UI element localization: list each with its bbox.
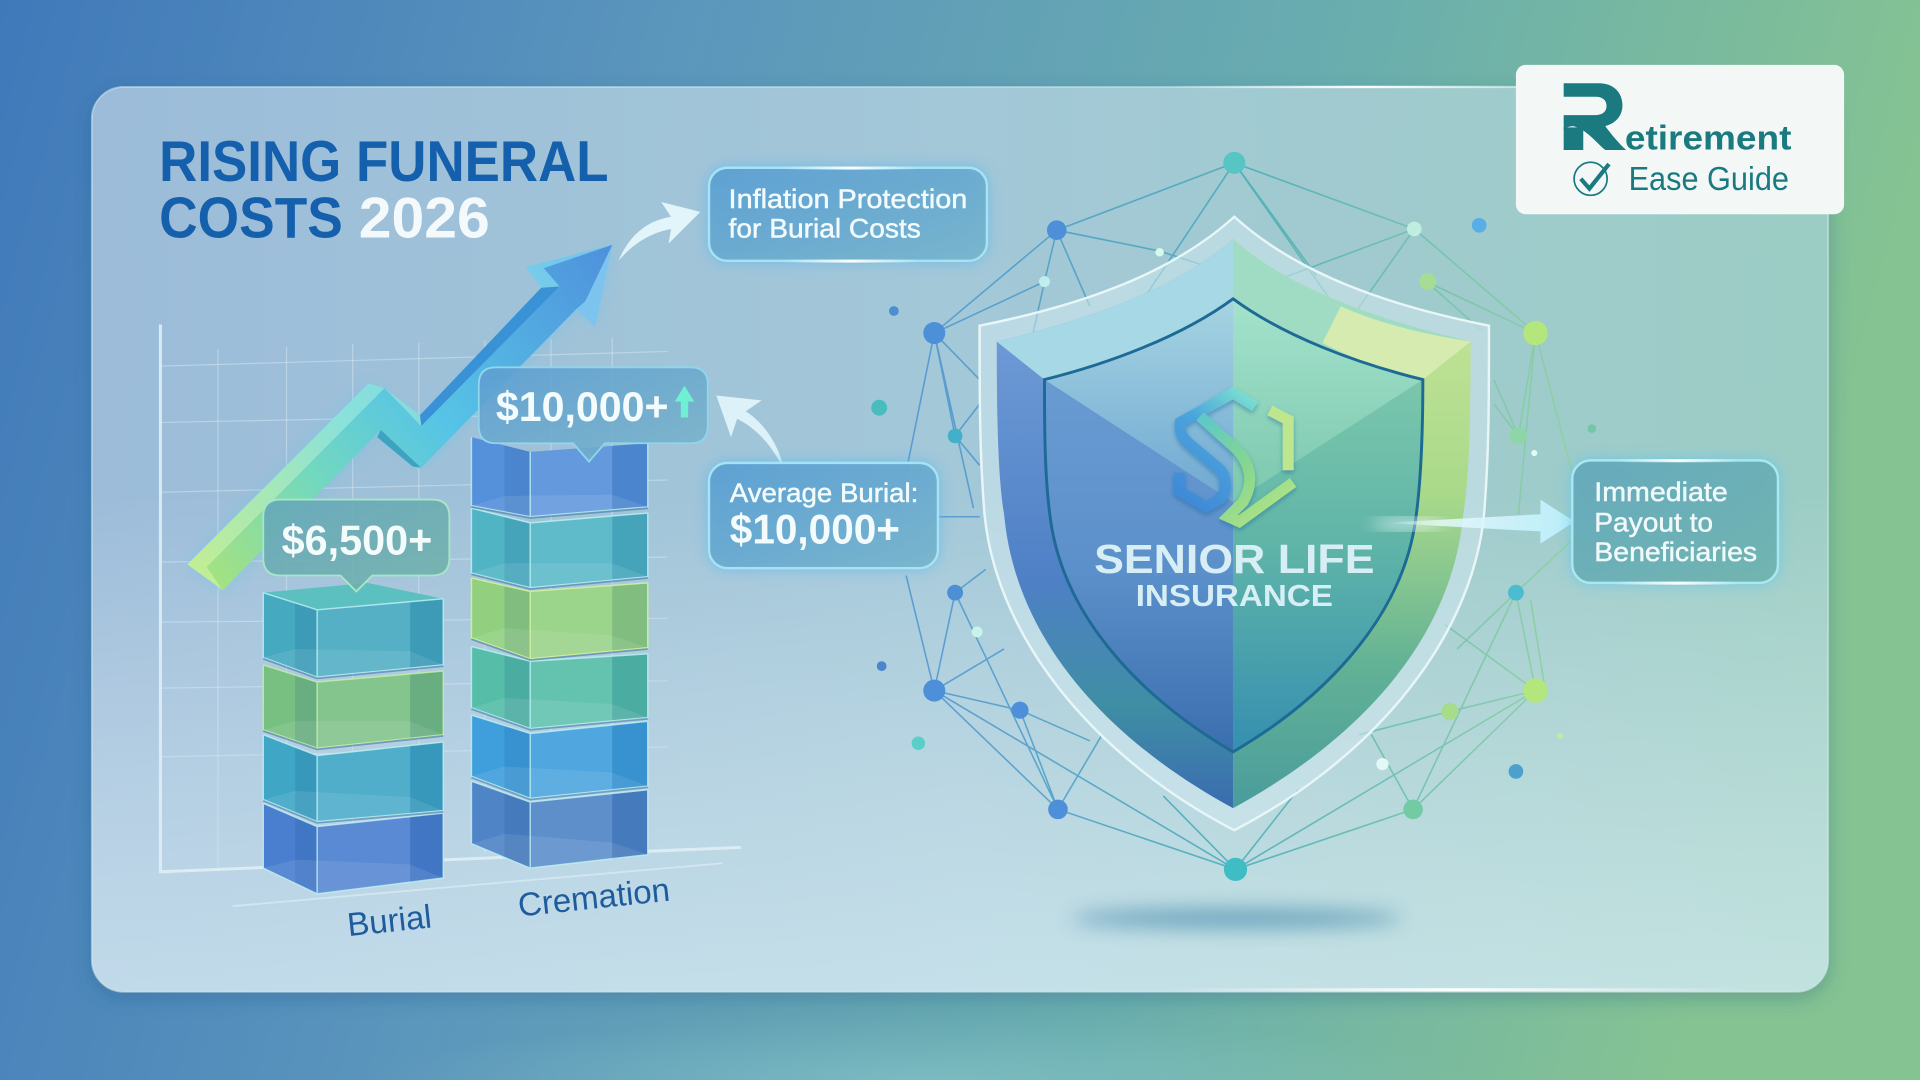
callout: average burial: Average Burial: xyxy=(730,478,918,508)
bar label: cremation: Cremation xyxy=(516,872,672,924)
callout: inflation protection: Inflation Protection xyxy=(729,184,967,214)
burial block 1 xyxy=(263,803,443,894)
callout: immediate payout: Payout to xyxy=(1594,507,1713,537)
shield middle rim right xyxy=(1233,239,1471,808)
shield top facets xyxy=(997,239,1471,380)
network mesh around shield xyxy=(871,152,1596,881)
logo letter R xyxy=(1564,83,1626,150)
cremation block 5 xyxy=(471,508,648,589)
value bubble: cremation $10,000+ xyxy=(479,367,708,462)
bar label: burial: Burial xyxy=(345,899,433,944)
curved arrow to cremation bubble xyxy=(716,396,785,473)
burial block 4 xyxy=(263,583,443,678)
panel: glass card xyxy=(92,86,1828,992)
callout: immediate payout xyxy=(1572,459,1778,585)
callout: immediate payout: Immediate xyxy=(1594,477,1728,507)
arrow side faces xyxy=(187,245,612,590)
shield inner right face xyxy=(1233,299,1423,752)
callout: inflation protection: for Burial Costs xyxy=(729,214,921,244)
callout: inflation protection xyxy=(709,167,987,263)
shield middle rim left xyxy=(997,239,1233,808)
value bubble: cremation $10,000+: $10,000+ xyxy=(496,383,669,430)
icon: SL monogram xyxy=(1179,393,1293,522)
logo: retirement ease guide xyxy=(1516,65,1844,214)
title xyxy=(159,130,609,251)
callout: immediate payout: Beneficiaries xyxy=(1594,537,1757,567)
icon: check circle xyxy=(1574,162,1609,195)
rising trend arrow xyxy=(187,245,612,590)
callout: average burial: $10,000+ xyxy=(730,506,900,553)
burial block 3 xyxy=(263,665,443,749)
shield inner left face xyxy=(1044,299,1233,752)
chart grid and axes xyxy=(160,324,741,906)
burial block 2 xyxy=(263,735,443,823)
cremation block 1 xyxy=(471,781,648,868)
shield: senior life insurance xyxy=(980,217,1489,830)
network nodes xyxy=(871,152,1596,881)
value bubble: burial $6,500+ xyxy=(263,500,449,591)
logo: retirement ease guide: Ease Guide xyxy=(1629,161,1789,198)
payout arrow xyxy=(1371,500,1575,544)
title: 2026 xyxy=(359,187,490,251)
arrow front face xyxy=(207,245,612,590)
shield text: INSURANCE xyxy=(1136,579,1333,613)
value bubble: burial $6,500+: $6,500+ xyxy=(282,517,432,564)
title: RISING FUNERAL xyxy=(159,130,609,194)
shadow under shield xyxy=(1071,909,1402,928)
cremation block 6 xyxy=(471,437,648,518)
icon: small up arrow xyxy=(675,386,694,418)
shield outer glass rim xyxy=(980,217,1489,830)
shield text xyxy=(1094,536,1374,613)
cremation block 4 xyxy=(471,578,648,660)
logo: retirement ease guide: etirement xyxy=(1625,119,1791,157)
shield text: SENIOR LIFE xyxy=(1094,536,1374,582)
cremation block 2 xyxy=(471,715,648,800)
title: COSTS xyxy=(159,187,343,251)
bar stack: burial xyxy=(263,583,443,894)
callout: average burial xyxy=(709,463,938,568)
cremation block 3 xyxy=(471,647,648,730)
bar stack: cremation xyxy=(471,437,648,868)
curved arrow to inflation callout xyxy=(618,202,700,261)
shield inner top facets xyxy=(1044,299,1423,502)
